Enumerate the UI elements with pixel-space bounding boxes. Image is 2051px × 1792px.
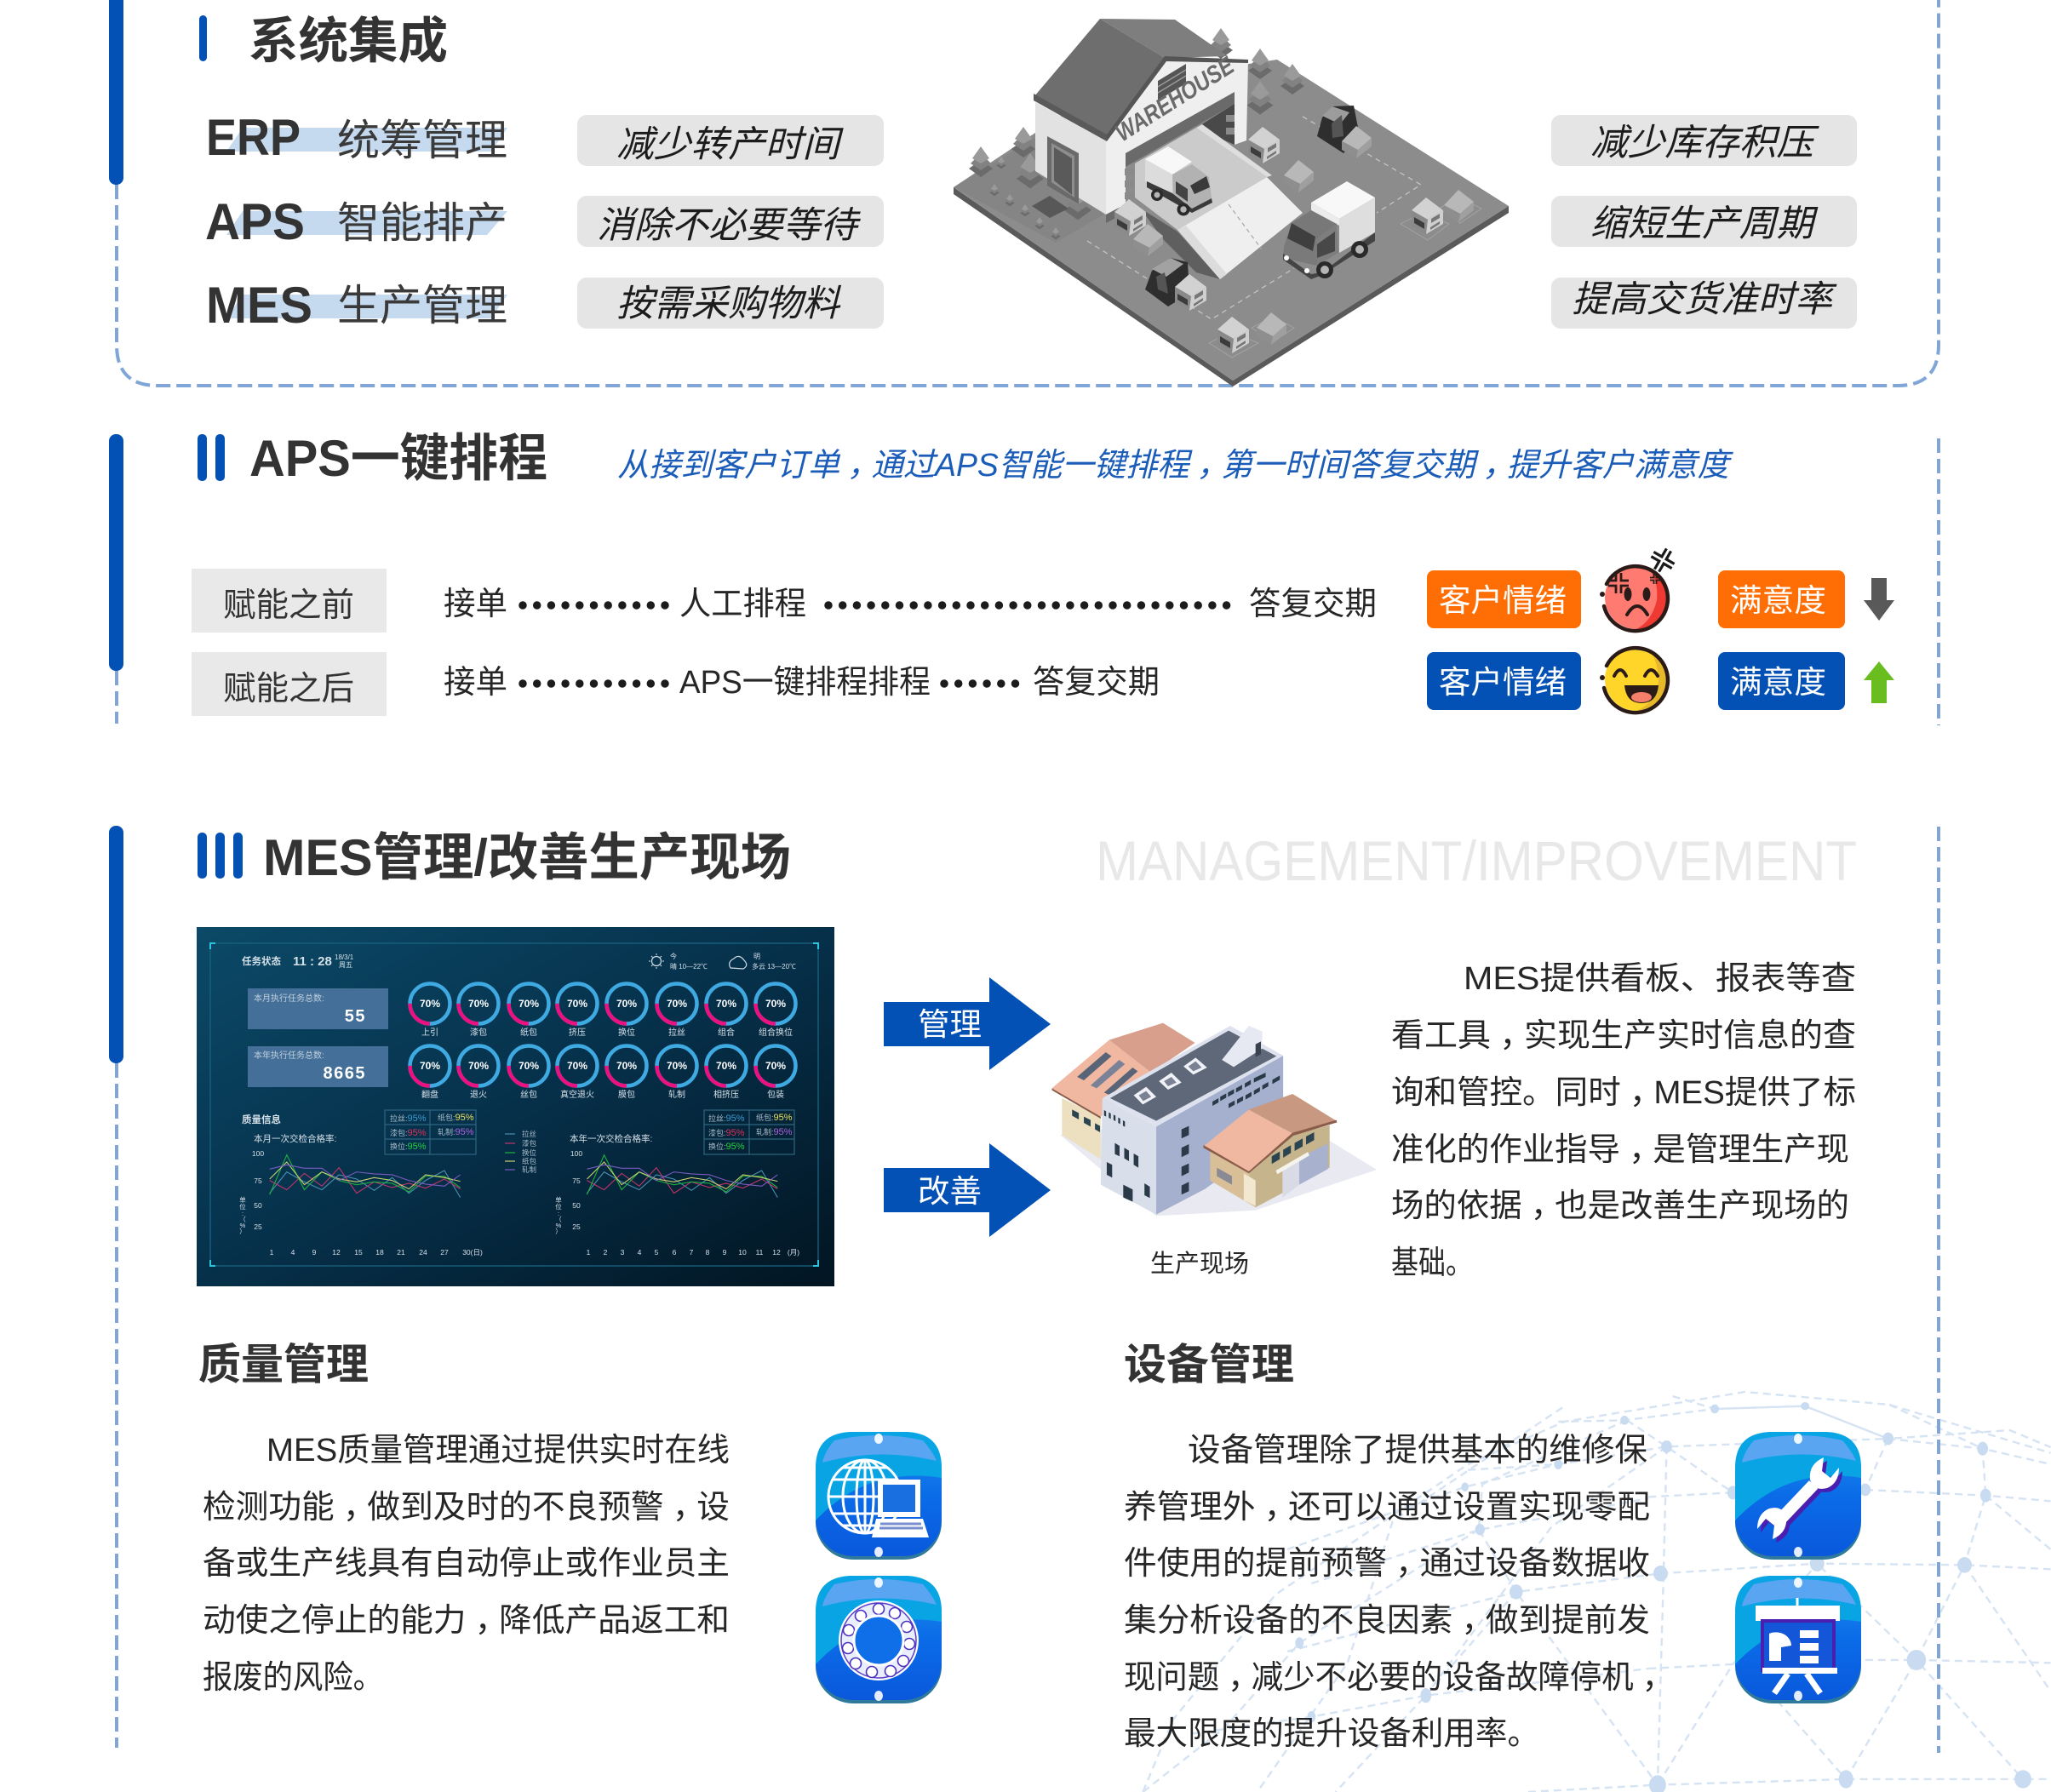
text block: MES description: 基础。: [1391, 1245, 1473, 1281]
text block: equipment management: [1124, 1433, 1674, 1752]
dashboard progress rings row 1: 纸包: [520, 1027, 537, 1038]
icon: presentation board: [1735, 1576, 1861, 1703]
dashboard progress rings row 2: [410, 1045, 795, 1100]
benefit pill 5: 缩短生产周期: [1590, 203, 1819, 244]
icon: bearing: [816, 1576, 942, 1703]
dashboard header: 晴 10—22℃: [670, 962, 708, 970]
row ERP: [206, 109, 507, 166]
dashboard progress rings row 2: 70%: [518, 1060, 539, 1072]
dashboard progress rings row 2: 70%: [667, 1060, 687, 1072]
dashboard progress rings row 1: 组合换位: [759, 1027, 793, 1038]
dashboard chart right: [555, 1133, 799, 1257]
dashboard chart left: 18: [375, 1248, 384, 1257]
dashboard progress rings row 2: 70%: [616, 1060, 637, 1072]
badge: emotion after: 客户情绪: [1439, 665, 1567, 700]
dashboard table right: 纸包:95%: [756, 1113, 793, 1123]
dashboard header: [242, 952, 796, 970]
small truck: [1145, 146, 1212, 216]
dashboard chart left: 75: [254, 1177, 262, 1185]
panel: system integration: [109, 0, 1939, 386]
benefit pill 5: [1551, 196, 1857, 247]
dashboard chart right: 1: [587, 1248, 591, 1257]
dashboard chart right: 100: [570, 1149, 582, 1158]
benefit pill 6: 提高交货准时率: [1572, 279, 1837, 320]
dashboard progress rings row 1: 70%: [420, 998, 440, 1010]
dashboard header: 明: [753, 953, 760, 960]
dashboard legend: 漆包: [522, 1139, 537, 1148]
row APS: [205, 193, 507, 250]
section accent bar: [109, 826, 123, 1063]
forklifts: [1145, 106, 1360, 306]
label: before: [192, 569, 387, 633]
dashboard chart left: 1: [270, 1248, 274, 1257]
dashboard chart left: 4: [291, 1248, 295, 1257]
benefit pill 4: 减少库存积压: [1590, 123, 1819, 163]
dashboard chart left: %: [240, 1222, 246, 1229]
row APS: APS: [205, 193, 305, 250]
panel: MES management: [109, 826, 1939, 1753]
dashboard table left: [385, 1110, 476, 1154]
badge: emotion before: 客户情绪: [1439, 583, 1567, 618]
heading: APS: APS一键排程: [249, 430, 547, 487]
dashboard chart left: 25: [254, 1222, 262, 1231]
dashboard chart left: 位: [239, 1202, 246, 1211]
dashboard progress rings row 1: 漆包: [470, 1027, 487, 1038]
heading: quality management: 质量管理: [198, 1341, 369, 1388]
text block: MES description: MES提供看板、报表等查: [1464, 961, 1856, 997]
text block: quality management: 报废的风险。: [203, 1660, 383, 1696]
dashboard chart right: 11: [756, 1248, 764, 1257]
dashboard chart right: 3: [621, 1248, 625, 1257]
dashboard chart left: 100: [252, 1149, 264, 1158]
background network globe: [1143, 1392, 2051, 1792]
dashboard progress rings row 1: 70%: [765, 998, 786, 1010]
text block: quality management: 动使之停止的能力 ，降低产品返工和: [203, 1603, 730, 1639]
dashboard chart right: （: [555, 1216, 562, 1223]
text block: equipment management: 件使用的提前预警 ，通过设备数据收: [1124, 1546, 1650, 1582]
flow after: 接单: [444, 665, 507, 701]
dashboard progress rings row 1: 70%: [667, 998, 687, 1010]
heading marker: [199, 15, 207, 61]
dashboard header: 周五: [339, 961, 352, 969]
dashboard chart left: 21: [397, 1248, 405, 1257]
dashboard progress rings row 1: 70%: [518, 998, 539, 1010]
flow after: 答复交期: [1033, 665, 1160, 701]
text block: quality management: MES质量管理通过提供实时在线: [266, 1433, 730, 1469]
dashboard chart right: 本年一次交检合格率:: [570, 1133, 652, 1144]
benefit pill 6: [1551, 278, 1857, 329]
dashboard progress rings row 2: 70%: [567, 1060, 587, 1072]
arrow: management: [884, 977, 1051, 1070]
icon: angry face: [1600, 544, 1679, 631]
text block: quality management: [203, 1433, 730, 1696]
dashboard stat box month: [248, 988, 388, 1029]
row MES: [206, 277, 507, 334]
warehouse illustration: [954, 19, 1509, 386]
warehouse sign: WAREHOUSE: [1111, 52, 1240, 147]
row ERP: 统筹管理: [337, 117, 507, 164]
dashboard chart left: 12: [332, 1248, 341, 1257]
dashboard chart right: 2: [604, 1248, 608, 1257]
dashboard progress rings row 1: 70%: [716, 998, 736, 1010]
text block: quality management: 备或生产线具有自动停止或作业员主: [203, 1546, 730, 1582]
panel: APS one-click scheduling: [109, 430, 1939, 725]
dashboard chart right: 4: [638, 1248, 642, 1257]
dashboard table left: 换位:95%: [390, 1142, 427, 1152]
dashboard legend: 拉丝: [522, 1130, 537, 1138]
dashboard progress rings row 1: 挤压: [569, 1027, 586, 1038]
dashboard chart right: :: [558, 1210, 559, 1217]
dashboard progress rings row 2: 轧制: [668, 1089, 685, 1100]
dashboard progress rings row 1: 70%: [616, 998, 637, 1010]
dashboard progress rings row 1: 70%: [567, 998, 587, 1010]
dashboard progress rings row 2: 70%: [716, 1060, 736, 1072]
heading marker: [198, 434, 225, 481]
heading: equipment management: 设备管理: [1124, 1341, 1294, 1388]
dashboard legend: 轧制: [522, 1165, 536, 1174]
pallets: [1114, 126, 1474, 353]
dashboard legend: [505, 1130, 537, 1174]
dashboard chart right: 12: [772, 1248, 781, 1257]
dashboard quality heading: 质量信息: [242, 1114, 281, 1125]
text block: equipment management: 养管理外 ，还可以通过设置实现零配: [1124, 1490, 1650, 1526]
row MES: 生产管理: [337, 282, 507, 329]
dashboard chart left: 50: [254, 1201, 262, 1210]
badge: satisfaction after: [1718, 652, 1845, 710]
dashboard chart left: ）: [239, 1228, 246, 1235]
dashboard header: 任务状态: [242, 955, 281, 967]
flow after: APS一键排程排程: [679, 665, 931, 701]
text block: quality management: 检测功能 ，做到及时的不良预警 ，设: [203, 1490, 730, 1526]
text block: equipment management: 集分析设备的不良因素 ，做到提前发: [1124, 1603, 1650, 1639]
dashboard legend: 换位: [522, 1148, 537, 1157]
dashboard progress rings row 2: 70%: [420, 1060, 440, 1072]
dashboard header: 今: [670, 952, 677, 960]
dashboard progress rings row 2: 70%: [765, 1060, 786, 1072]
dashboard progress rings row 1: 换位: [618, 1027, 635, 1038]
caption: production site: 生产现场: [1150, 1250, 1249, 1278]
flow before: [444, 587, 1377, 622]
section accent bar: [109, 0, 123, 185]
dashboard table left: 轧制:95%: [438, 1127, 474, 1137]
dashboard table left: 纸包:95%: [438, 1113, 474, 1123]
text block: MES description: 看工具 ，实现生产实时信息的查: [1391, 1018, 1856, 1054]
dashboard chart right: %: [556, 1222, 562, 1229]
heading marker: [198, 833, 243, 879]
dashboard legend: 纸包: [522, 1157, 537, 1165]
arrow: improvement: [884, 1143, 1051, 1237]
row APS: 智能排产: [337, 199, 507, 247]
dashboard chart left: （: [239, 1216, 246, 1223]
dashboard progress rings row 1: 上引: [421, 1028, 438, 1038]
dashboard header: 多云 13—20℃: [752, 962, 796, 970]
dashboard chart right: 5: [655, 1248, 659, 1257]
arrow: improvement: 改善: [918, 1174, 982, 1209]
dashboard stat box month: 本月执行任务总数:: [254, 993, 324, 1004]
watermark: MANAGEMENT/IMPROVEMENT: [1096, 829, 1857, 892]
dashboard chart left: 本月一次交检合格率:: [254, 1133, 336, 1144]
benefit pill 4: [1551, 115, 1857, 166]
dashboard chart right: (月): [788, 1248, 799, 1257]
dashboard chart left: 单: [239, 1195, 246, 1204]
heading: system integration: 系统集成: [249, 14, 448, 69]
dashboard progress rings row 1: 70%: [468, 998, 489, 1010]
flow before: 人工排程: [679, 587, 806, 622]
dashboard progress rings row 1: 组合: [718, 1027, 735, 1038]
heading: MES: MES管理/改善生产现场: [263, 829, 791, 886]
flow before: 接单: [444, 587, 507, 622]
dashboard progress rings row 2: 真空退火: [560, 1089, 594, 1100]
badge: satisfaction before: 满意度: [1730, 583, 1826, 618]
dashboard table left: 漆包:95%: [390, 1128, 427, 1138]
dashboard chart right: 9: [723, 1248, 727, 1257]
label: before: 赋能之前: [223, 587, 354, 624]
text block: MES description: 询和管控。同时 ，MES提供了标: [1391, 1075, 1856, 1111]
arrow: up: [1864, 661, 1894, 703]
dashboard chart right: 25: [572, 1222, 581, 1231]
dashboard chart left: 30(日): [462, 1248, 483, 1257]
dashboard chart right: 75: [572, 1177, 581, 1185]
dashboard table right: 换位:95%: [708, 1142, 745, 1152]
dashboard chart left: [239, 1133, 483, 1257]
badge: emotion before: [1427, 570, 1581, 628]
dashboard chart right: 单: [555, 1195, 562, 1204]
dashboard chart right: 位: [555, 1202, 562, 1211]
row ERP: ERP: [206, 109, 301, 166]
text block: equipment management: 现问题，减少不必要的设备故障停机，: [1124, 1660, 1674, 1696]
dashboard stat box month: 55: [345, 1007, 366, 1026]
dashboard table right: 漆包:95%: [708, 1128, 745, 1138]
text block: MES description: [1391, 961, 1856, 1281]
dashboard progress rings row 2: 翻盘: [421, 1089, 438, 1100]
dashboard table right: [704, 1110, 794, 1154]
benefit pill 1: [577, 115, 884, 166]
row MES: MES: [206, 277, 312, 334]
label: after: 赋能之后: [223, 671, 354, 707]
badge: satisfaction before: [1718, 570, 1845, 628]
factory illustration: [1051, 1023, 1377, 1216]
badge: satisfaction after: 满意度: [1730, 665, 1826, 700]
text block: MES description: 准化的作业指导 ，是管理生产现: [1391, 1132, 1849, 1168]
trees: [969, 28, 1304, 239]
dashboard chart right: 50: [572, 1201, 581, 1210]
dashboard table right: 轧制:95%: [756, 1127, 793, 1137]
text block: MES description: 场的依据 ，也是改善生产现场的: [1391, 1188, 1849, 1224]
icon: wrench: [1735, 1432, 1861, 1560]
dashboard stat box year: 本年执行任务总数:: [254, 1050, 324, 1061]
dashboard progress rings row 2: 相挤压: [713, 1089, 739, 1100]
dashboard progress rings row 1: 拉丝: [668, 1027, 685, 1038]
benefit pill 2: [577, 196, 884, 247]
dashboard chart left: 15: [354, 1248, 363, 1257]
dashboard chart right: ）: [555, 1228, 562, 1235]
text block: equipment management: 设备管理除了提供基本的维修保: [1188, 1433, 1647, 1469]
dashboard screenshot: [197, 927, 834, 1286]
dashboard progress rings row 2: 丝包: [520, 1089, 537, 1100]
big truck: [1283, 181, 1375, 279]
dashboard chart right: 10: [738, 1248, 747, 1257]
dashboard progress rings row 2: 退火: [470, 1090, 487, 1100]
dashboard chart left: :: [242, 1210, 243, 1217]
dashboard chart right: 6: [673, 1248, 677, 1257]
dashboard progress rings row 2: 70%: [468, 1060, 489, 1072]
dashboard table right: 拉丝:95%: [708, 1114, 745, 1124]
dashboard chart left: 9: [312, 1248, 317, 1257]
dashboard chart left: 24: [419, 1248, 427, 1257]
dashboard stat box year: 8665: [324, 1064, 366, 1083]
arrow: down: [1864, 578, 1894, 621]
benefit pill 1: 减少转产时间: [616, 124, 844, 165]
icon: globe and laptop: [816, 1432, 942, 1560]
benefit pill 2: 消除不必要等待: [597, 205, 861, 246]
subtitle: 从接到客户订单，通过APS智能一键排程，第一时间答复交期，提升客户满意度: [617, 448, 1734, 484]
dashboard progress rings row 1: [410, 984, 795, 1038]
dashboard chart left: 27: [440, 1248, 449, 1257]
dashboard chart right: 8: [706, 1248, 710, 1257]
dashboard header: 18/3/1: [335, 953, 354, 961]
section accent bar: [109, 434, 123, 671]
text block: equipment management: 最大限度的提升设备利用率。: [1124, 1716, 1539, 1752]
benefit pill 3: [577, 278, 884, 329]
benefit pill 3: 按需采购物料: [616, 283, 842, 324]
flow after: [444, 665, 1160, 701]
dashboard header: 11 : 28: [293, 954, 332, 969]
dashboard stat box year: [248, 1046, 388, 1087]
arrow: management: 管理: [918, 1007, 982, 1042]
dashboard progress rings row 2: 包装: [767, 1089, 784, 1100]
icon: happy face: [1600, 648, 1669, 713]
dashboard chart right: 7: [690, 1248, 694, 1257]
flow before: 答复交期: [1249, 587, 1377, 622]
dashboard progress rings row 2: 膜包: [618, 1089, 635, 1100]
label: after: [192, 652, 387, 716]
badge: emotion after: [1427, 652, 1581, 710]
dashboard table left: 拉丝:95%: [390, 1114, 427, 1124]
